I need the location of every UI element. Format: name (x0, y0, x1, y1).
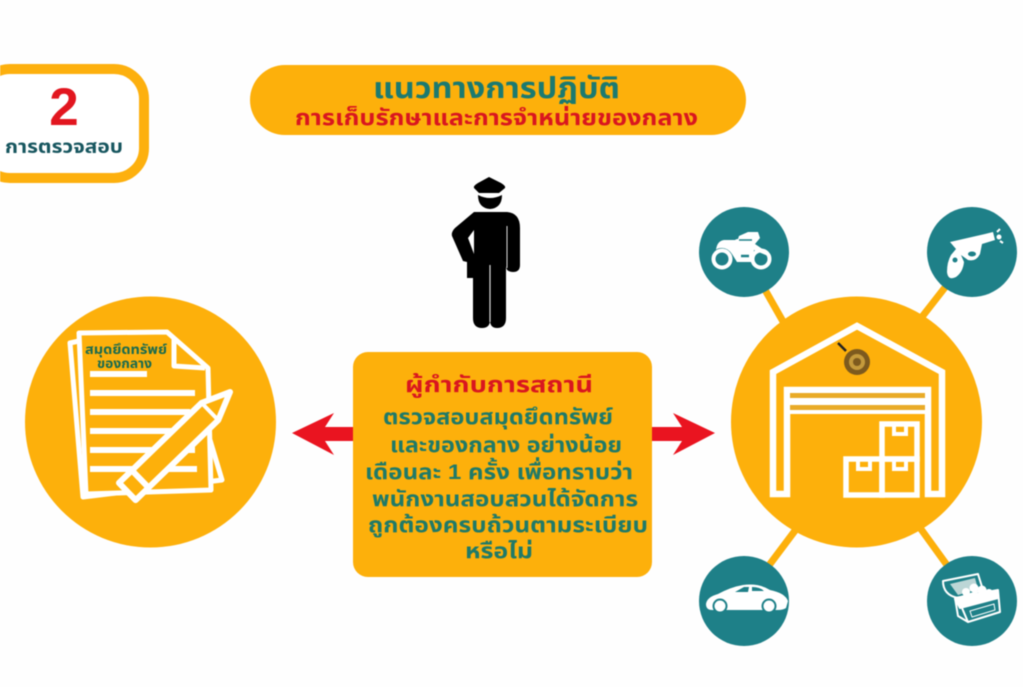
arrow: right (650, 413, 715, 455)
icon: treasure chest (927, 556, 1017, 646)
panel body text: พนักงานสอบสวนได้จัดการ (372, 488, 638, 511)
title banner (250, 65, 746, 135)
panel body text: และของกลาง อย่างน้อย (390, 434, 622, 457)
connector lines (760, 281, 952, 572)
book label: ของกลาง (97, 356, 152, 371)
book label (85, 342, 167, 371)
section badge (0, 69, 144, 178)
panel body text: หรือไม่ (465, 540, 533, 563)
arrow: left (292, 413, 356, 455)
icon: document (70, 332, 222, 497)
panel: seizure record book (25, 296, 276, 548)
icon: pencil (119, 383, 238, 500)
icon: warehouse (773, 326, 942, 495)
icon: police officer (452, 177, 520, 328)
icon: car (699, 556, 789, 646)
section number: 2 (49, 78, 79, 137)
panel body text: ตรวจสอบสมุดยึดทรัพย์ (383, 406, 613, 430)
icon: revolver (927, 207, 1017, 297)
icon: stacked boxes (846, 424, 917, 495)
panel: station chief duties (353, 352, 652, 577)
panel: storage warehouse (731, 296, 982, 548)
panel body text: ถูกต้องครบถ้วนตามระเบียบ (368, 514, 648, 538)
panel heading: ผู้กำกับการสถานี (405, 372, 593, 398)
icon: police seal (838, 343, 870, 375)
panel body text: เดือนละ 1 ครั้ง เพื่อทราบว่า (365, 457, 633, 484)
section label: การตรวจสอบ (5, 137, 123, 158)
icon: motorcycle (699, 207, 789, 297)
title: แนวทางการปฏิบัติ (373, 73, 620, 105)
panel body text (365, 406, 648, 563)
book label: สมุดยึดทรัพย์ (85, 342, 167, 357)
subtitle: การเก็บรักษาและการจำหน่ายของกลาง (295, 105, 698, 130)
